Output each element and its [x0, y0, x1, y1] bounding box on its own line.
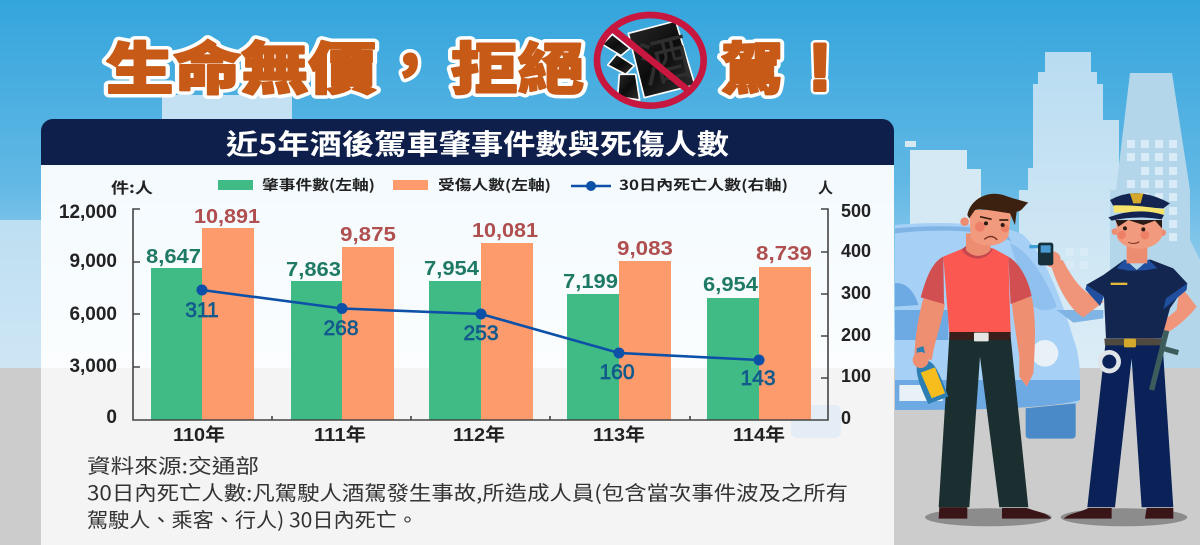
panel heading text: 近5年酒後駕車肇事件數與死傷人數	[226, 123, 729, 163]
title: main text: 駕	[721, 25, 783, 106]
x axis labels	[173, 424, 785, 445]
right axis labels: 200	[841, 325, 871, 345]
data labels: accident count: 6,954	[703, 274, 759, 296]
officer: arms	[1050, 260, 1104, 317]
data labels: injured count: 9,875	[340, 224, 396, 246]
man: trousers	[939, 337, 1028, 507]
officer: shoes	[1064, 508, 1112, 519]
title: outline layer: 駕	[721, 25, 783, 106]
title: main text: !	[809, 30, 831, 104]
data labels: accident count	[146, 246, 759, 296]
x axis labels: 113年	[593, 424, 645, 445]
data labels: deaths: 268	[323, 317, 359, 340]
data labels: injured count: 9,083	[617, 238, 673, 260]
background: city skyline	[0, 52, 1200, 368]
breathalyzer	[1029, 243, 1053, 265]
x axis labels: 112年	[453, 424, 505, 445]
left axis labels: 3,000	[69, 356, 117, 377]
data labels: injured count: 8,739	[756, 243, 812, 265]
officer: baton	[1152, 331, 1178, 390]
data labels: deaths: 160	[599, 361, 635, 384]
icon: no drink-driving sign: 酒	[632, 17, 698, 99]
data labels: deaths: 143	[740, 367, 776, 390]
legend: 肇事件數(左軸)	[262, 175, 375, 195]
title: outline layer: 生命無價	[106, 25, 376, 106]
police officer	[1045, 193, 1197, 519]
axes	[133, 209, 828, 420]
man: shirt	[943, 248, 1011, 333]
title: outline layer: ,	[400, 1, 420, 82]
bar chart with line	[59, 201, 871, 445]
x axis labels: 111年	[314, 424, 366, 445]
man: belt	[949, 332, 1011, 340]
officer: shirt	[1086, 259, 1187, 338]
left axis labels: 9,000	[69, 251, 117, 272]
data labels: injured count: 10,081	[472, 220, 538, 242]
legend: 人	[818, 177, 833, 198]
right axis labels: 500	[841, 201, 871, 221]
title: main text: ,	[400, 1, 420, 82]
legend: 件:人	[111, 177, 153, 198]
bars: accident count	[151, 268, 759, 420]
line: deaths within 30 days	[196, 284, 764, 366]
panel: chart card	[41, 119, 894, 545]
officer: cap	[1110, 193, 1170, 208]
man: head	[966, 233, 991, 256]
background: ground	[0, 368, 1200, 545]
illustration: car and figures	[895, 193, 1197, 526]
right axis labels: 0	[841, 408, 851, 428]
officer: trousers	[1087, 345, 1173, 507]
background: sky	[0, 0, 1200, 368]
notes: 駕駛人、乘客、行人) 30日內死亡。	[87, 504, 418, 533]
car	[895, 223, 1103, 439]
title: outline layer: 拒絕	[451, 25, 584, 106]
title: main text: 生命無價	[106, 25, 376, 106]
man: hair	[967, 194, 1028, 225]
notes: 資料來源:交通部	[87, 450, 259, 479]
icon: no drink-driving sign	[597, 15, 704, 106]
man	[913, 194, 1051, 519]
x axis labels: 110年	[173, 424, 225, 445]
title: outline layer	[106, 1, 831, 106]
legend: 受傷人數(左軸)	[438, 175, 551, 195]
shadows	[925, 508, 1052, 526]
title: main text	[106, 1, 831, 106]
man: shoes	[939, 507, 967, 519]
bars: injured count	[202, 228, 811, 420]
right axis labels: 400	[841, 241, 871, 261]
title: outline layer: !	[809, 30, 831, 104]
right axis labels: 300	[841, 283, 871, 303]
data labels: injured count: 10,891	[194, 206, 260, 228]
officer: belt	[1104, 339, 1163, 345]
left axis labels: 12,000	[59, 202, 117, 223]
data labels: accident count: 7,954	[424, 258, 480, 280]
x axis labels: 114年	[733, 424, 785, 445]
left axis labels: 0	[106, 407, 117, 428]
data labels: deaths: 253	[463, 322, 499, 345]
data labels: injured count	[194, 206, 812, 265]
title banner	[106, 1, 831, 106]
panel body	[41, 150, 894, 368]
man: bottle	[913, 346, 948, 404]
notes: 30日內死亡人數:凡駕駛人酒駕發生事故,所造成人員(包含當次事件波及之所有	[87, 477, 848, 506]
right axis labels	[841, 201, 871, 428]
officer: handcuffs	[1100, 352, 1119, 371]
data labels: deaths	[185, 299, 776, 390]
data labels: accident count: 7,863	[286, 259, 341, 281]
left axis labels	[59, 202, 117, 428]
data labels: deaths: 311	[185, 299, 219, 322]
title: main text: 拒絕	[451, 25, 584, 106]
left axis labels: 6,000	[69, 304, 117, 325]
panel heading bar	[41, 119, 894, 165]
right axis labels: 100	[841, 366, 871, 386]
notes	[87, 450, 848, 533]
legend: 30日內死亡人數(右軸)	[619, 175, 788, 195]
data labels: accident count: 7,199	[563, 271, 618, 293]
officer: head	[1127, 245, 1147, 263]
legend	[111, 175, 833, 198]
man: arms	[914, 298, 945, 360]
data labels: accident count: 8,647	[146, 246, 201, 268]
